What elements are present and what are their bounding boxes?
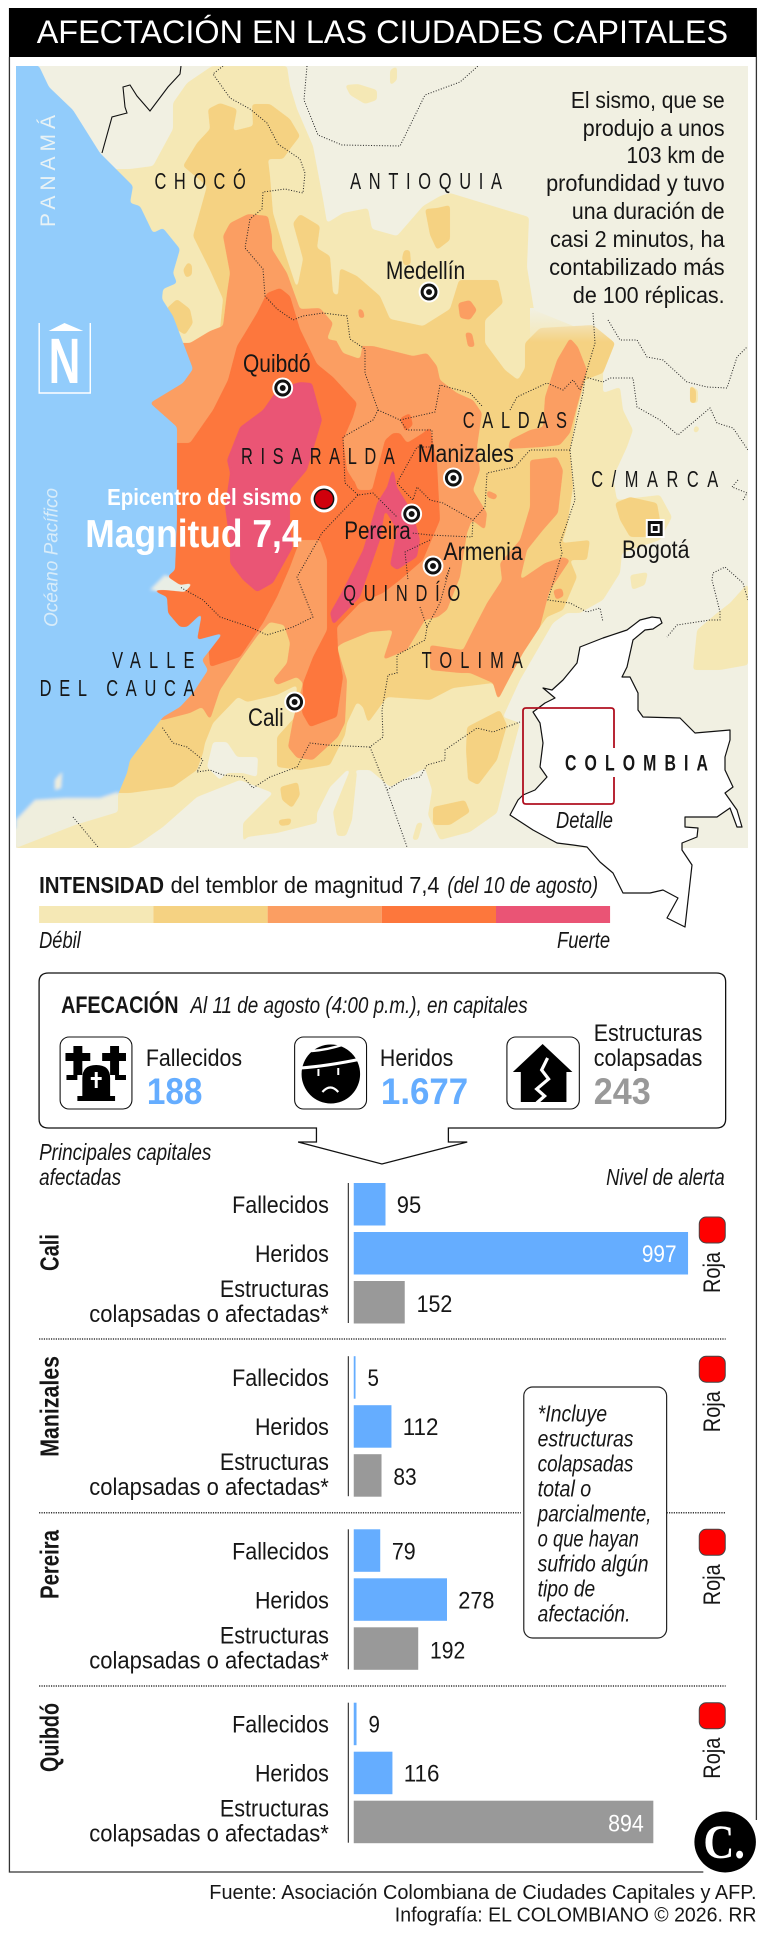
- chart: Pereira: [37, 1529, 726, 1674]
- map labels: CALDAS: [463, 408, 567, 434]
- icon: collapsed house: [507, 1037, 579, 1109]
- chart: Pereira: Estructuras: [220, 1622, 329, 1649]
- chart: Pereira: Roja: [699, 1564, 726, 1605]
- map labels: VALLE: [112, 648, 194, 674]
- chart header labels: afectadas: [39, 1164, 121, 1190]
- chart: Pereira: Heridos: [255, 1587, 329, 1614]
- intensity legend: [39, 906, 610, 953]
- chart: Pereira: 79: [392, 1538, 416, 1565]
- map borders: [73, 66, 750, 847]
- callout: footnote: colapsadas: [538, 1451, 633, 1477]
- callout: footnote: [524, 1387, 667, 1638]
- locator map: Colombia: Detalle: [556, 807, 613, 833]
- map labels: Armenia: [443, 538, 523, 566]
- chart: Manizales: 5: [368, 1365, 379, 1392]
- intro text: 103 km de: [626, 142, 725, 168]
- chart: Cali: colapsadas o afectadas*: [89, 1301, 329, 1328]
- panel: affectation summary: Estructuras: [594, 1020, 702, 1047]
- intro text: [546, 87, 726, 308]
- panel: affectation summary: Fallecidos: [146, 1045, 242, 1072]
- map labels: Epicentro del sismo: [107, 484, 302, 510]
- chart: Quibdó: Heridos: [255, 1761, 329, 1788]
- chart: Manizales: colapsadas o afectadas*: [89, 1474, 329, 1501]
- panel: affectation summary: Heridos: [380, 1045, 453, 1072]
- callout: footnote: afectación.: [538, 1601, 630, 1627]
- map: [10, 60, 748, 848]
- chart: Quibdó: 116: [404, 1761, 439, 1788]
- map labels: CHOCÓ: [154, 168, 246, 195]
- callout: footnote: tipo de: [538, 1576, 595, 1602]
- chart: Quibdó: 894: [608, 1811, 644, 1838]
- chart: Pereira: 278: [458, 1587, 495, 1614]
- callout: footnote: total o: [538, 1476, 591, 1502]
- divider: [39, 1339, 726, 1686]
- icon: graves: [60, 1037, 132, 1109]
- chart: Cali: 997: [642, 1241, 677, 1268]
- chart: Cali: Estructuras: [220, 1276, 329, 1303]
- title: [9, 8, 757, 57]
- chart: Manizales: Manizales: [37, 1356, 65, 1457]
- map labels: PANAMÁ: [37, 115, 60, 227]
- panel: affectation summary: colapsadas: [594, 1045, 702, 1072]
- chart header labels: Nivel de alerta: [606, 1164, 725, 1190]
- chart: Manizales: Heridos: [255, 1414, 329, 1441]
- chart: Cali: Fallecidos: [232, 1192, 329, 1219]
- intensity legend: Débil: [39, 927, 81, 953]
- icon: epicenter marker: [311, 486, 337, 512]
- map labels: Quibdó: [243, 350, 310, 378]
- chart: Quibdó: colapsadas o afectadas*: [89, 1821, 329, 1848]
- map labels: Medellín: [386, 257, 465, 285]
- icon: injured face: [295, 1037, 367, 1109]
- callout: footnote: *Incluye: [538, 1401, 607, 1427]
- logo: [694, 1812, 756, 1872]
- intro text: profundidad y tuvo: [546, 170, 725, 196]
- chart: Quibdó: Fallecidos: [232, 1712, 329, 1739]
- chart: Cali: [37, 1183, 726, 1328]
- panel: affectation summary: AFECACIÓN: [61, 991, 179, 1019]
- chart: Cali: Roja: [699, 1251, 726, 1293]
- map labels: Manizales: [418, 440, 514, 468]
- chart header labels: [39, 1139, 725, 1190]
- logo: C.: [703, 1816, 745, 1869]
- panel: affectation summary: 188: [147, 1071, 202, 1112]
- chart: Cali: Cali: [37, 1234, 65, 1271]
- source credits: Infografía: EL COLOMBIANO © 2026. RR: [395, 1905, 756, 1927]
- map labels: Océano Pacífico: [41, 488, 63, 627]
- chart: Manizales: 83: [393, 1464, 417, 1491]
- callout: footnote: sufrido algún: [538, 1551, 648, 1577]
- map labels: DEL CAUCA: [40, 676, 195, 702]
- locator map: Colombia: COLOMBIA: [565, 752, 708, 776]
- heading: intensity: (del 10 de agosto): [447, 872, 598, 898]
- heading: intensity: del temblor de magnitud 7,4: [171, 872, 439, 898]
- chart: Pereira: 192: [430, 1637, 465, 1664]
- chart: Pereira: Pereira: [37, 1530, 65, 1599]
- intro text: de 100 réplicas.: [573, 282, 725, 308]
- source credits: Fuente: Asociación Colombiana de Ciudades Capitales y AFP.: [209, 1882, 756, 1904]
- map labels: [37, 87, 726, 732]
- source credits: [209, 1882, 756, 1927]
- title: AFECTACIÓN EN LAS CIUDADES CAPITALES: [37, 14, 728, 50]
- intro text: contabilizado más: [549, 254, 725, 280]
- chart: Manizales: Fallecidos: [232, 1365, 329, 1392]
- callout: footnote: estructuras: [538, 1426, 633, 1452]
- heading: intensity: INTENSIDAD: [39, 872, 164, 898]
- detail frame: [523, 708, 614, 804]
- chart: Manizales: [37, 1356, 726, 1501]
- panel: affectation summary: 1.677: [381, 1071, 468, 1112]
- map labels: Pereira: [344, 517, 411, 545]
- map labels: QUINDÍO: [343, 580, 460, 607]
- chart: Quibdó: Quibdó: [37, 1703, 65, 1772]
- chart: Cali: 95: [397, 1192, 421, 1219]
- heading: intensity: [39, 872, 598, 898]
- callout: footnote: parcialmente,: [537, 1501, 651, 1527]
- chart: Manizales: 112: [403, 1414, 438, 1441]
- intensity legend: Fuerte: [557, 927, 610, 953]
- intro text: casi 2 minutos, ha: [550, 226, 726, 252]
- city markers: [272, 282, 665, 712]
- map labels: Bogotá: [622, 536, 690, 564]
- chart: Quibdó: [37, 1703, 726, 1848]
- chart: Quibdó: Estructuras: [220, 1796, 329, 1823]
- map labels: TOLIMA: [422, 648, 523, 674]
- chart: Quibdó: Roja: [699, 1737, 726, 1779]
- chart: Pereira: colapsadas o afectadas*: [89, 1647, 329, 1674]
- locator map: Colombia: [510, 617, 742, 927]
- panel: affectation summary: 243: [594, 1071, 651, 1112]
- chart: Quibdó: 9: [369, 1712, 380, 1739]
- callout: footnote: o que hayan: [538, 1526, 639, 1552]
- icon: north arrow: N: [49, 325, 80, 397]
- intro text: El sismo, que se: [571, 87, 725, 113]
- chart: Manizales: Estructuras: [220, 1449, 329, 1476]
- map labels: ANTIOQUIA: [350, 169, 503, 195]
- map labels: Magnitud 7,4: [85, 513, 302, 556]
- map labels: C/MARCA: [591, 467, 719, 493]
- intro text: produjo a unos: [583, 115, 725, 141]
- intro text: una duración de: [572, 198, 725, 224]
- chart: Cali: 152: [417, 1291, 452, 1318]
- map labels: Cali: [248, 704, 284, 732]
- chart: Pereira: Fallecidos: [232, 1538, 329, 1565]
- chart: Manizales: Roja: [699, 1391, 726, 1432]
- panel: affectation summary: Al 11 de agosto (4:00 p.m.), en capitales: [189, 992, 528, 1018]
- chart header labels: Principales capitales: [39, 1139, 211, 1165]
- panel: affectation summary: [39, 973, 726, 1164]
- map labels: RISARALDA: [241, 444, 395, 470]
- chart: Cali: Heridos: [255, 1241, 329, 1268]
